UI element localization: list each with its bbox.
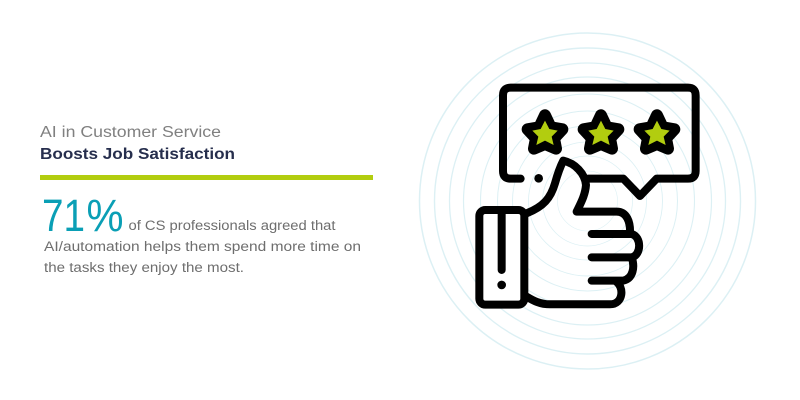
body text: the tasks they enjoy the most. — [44, 260, 244, 275]
body text — [44, 218, 361, 275]
cuff line — [490, 214, 514, 270]
icon: thumbs up with rating bubble — [479, 88, 696, 305]
bubble dot — [534, 174, 543, 183]
star 3 — [640, 115, 674, 149]
star 1 — [528, 115, 562, 149]
star 2 — [584, 115, 618, 149]
statistic: 71%: % — [86, 190, 124, 241]
hand — [527, 161, 639, 304]
concentric rings background — [420, 33, 756, 369]
statistic: 71%: 71 — [42, 190, 85, 241]
statistic: 71% — [42, 190, 124, 241]
heading: AI in Customer Service: AI in Customer Service — [40, 124, 221, 141]
green divider — [40, 175, 373, 180]
body text: of CS professionals agreed that — [128, 218, 336, 233]
speech bubble — [503, 88, 696, 196]
cuff dot — [497, 281, 506, 289]
heading: Boosts Job Satisfaction: Boosts Job Satisfaction — [40, 146, 235, 163]
cuff — [479, 210, 524, 305]
body text: AI/automation helps them spend more time on — [44, 239, 361, 254]
